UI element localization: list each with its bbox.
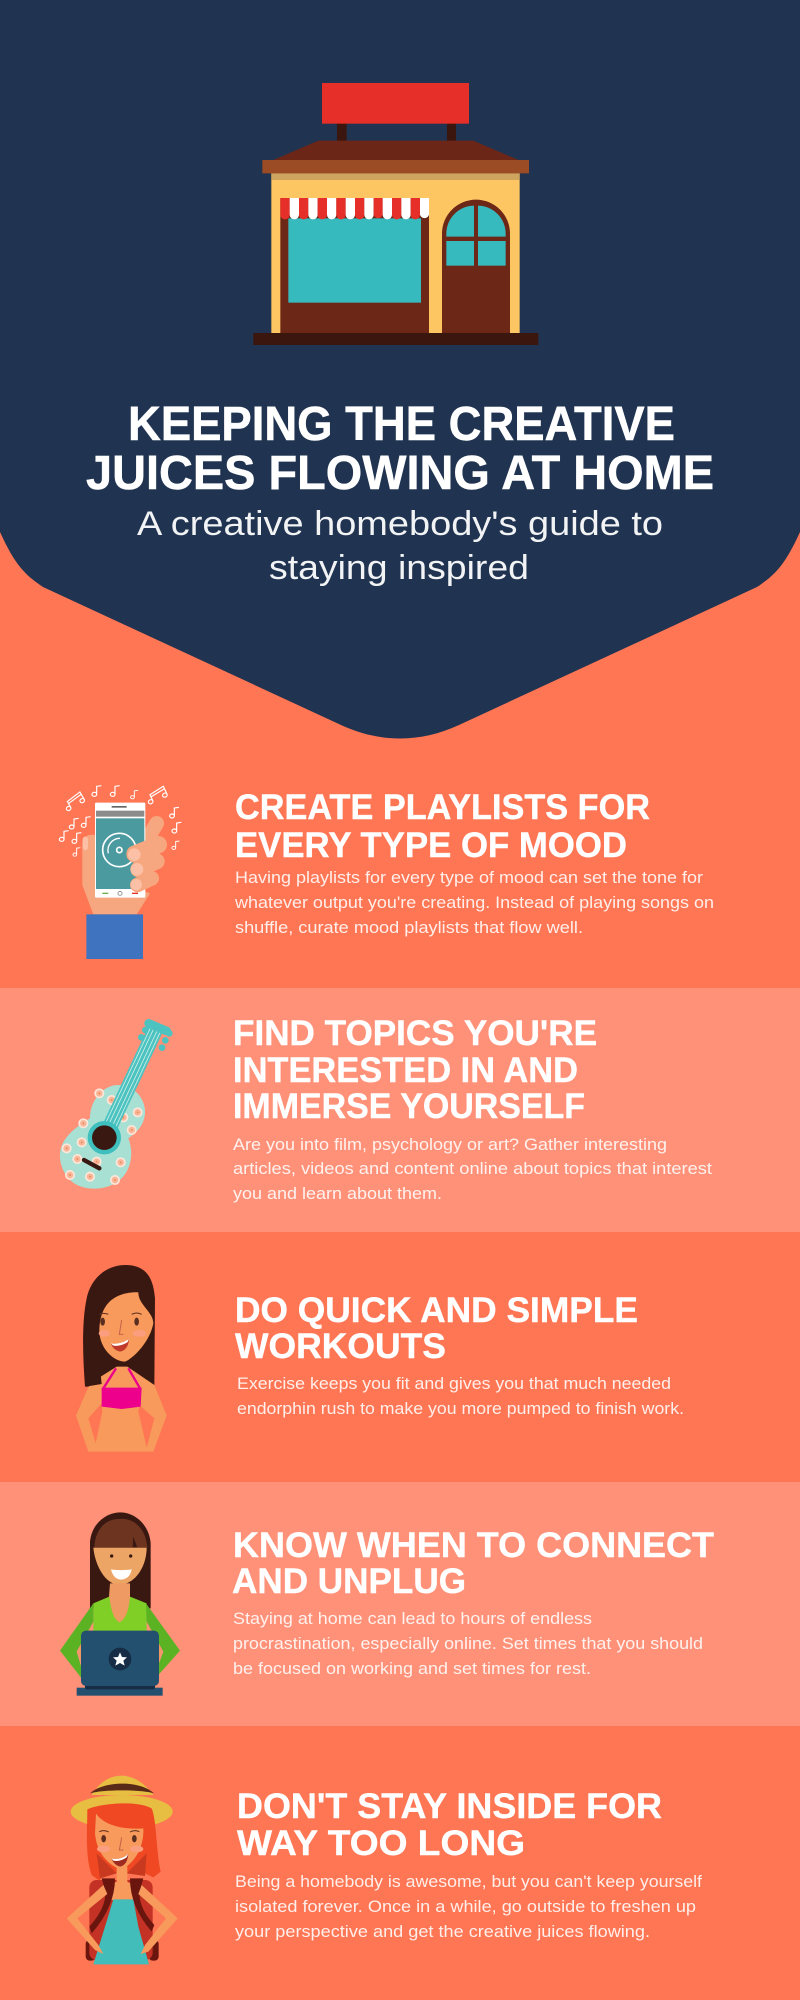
band: topic 2 — [0, 988, 800, 1232]
panel: connect and unplug — [60, 1512, 714, 1696]
heading: find topics: IMMERSE YOURSELF — [233, 1087, 585, 1126]
text: find topics: Are you into film, psychology or art? Gather interesting — [233, 1135, 667, 1154]
subtitle — [137, 505, 663, 587]
text: find topics — [233, 1135, 712, 1203]
heading: quick workouts: DO QUICK AND SIMPLE — [235, 1291, 638, 1330]
text: create playlists — [234, 868, 714, 937]
text: connect and unplug: Staying at home can lead to hours of endless — [233, 1609, 592, 1628]
text: quick workouts — [237, 1374, 684, 1418]
heading: connect and unplug — [232, 1526, 714, 1601]
icon: woman in pink top — [76, 1265, 167, 1452]
text: find topics: articles, videos and content online about topics that interest — [233, 1159, 712, 1178]
text: go outside — [235, 1872, 702, 1941]
heading: connect and unplug: AND UNPLUG — [232, 1562, 466, 1601]
icon: hand holding phone — [59, 786, 181, 959]
heading: find topics: FIND TOPICS YOU'RE — [233, 1014, 597, 1053]
heading: find topics: INTERESTED IN AND — [233, 1051, 578, 1090]
heading: create playlists: CREATE PLAYLISTS FOR — [235, 788, 650, 827]
text: connect and unplug: procrastination, especially online. Set times that you should — [233, 1634, 703, 1653]
heading: find topics — [233, 1014, 597, 1126]
icon: guitar — [60, 1023, 173, 1189]
header shape — [0, 0, 800, 738]
heading: go outside — [237, 1787, 662, 1863]
icon: shop house — [253, 83, 538, 345]
text: create playlists: Having playlists for every type of mood can set the tone for — [235, 868, 703, 887]
heading: connect and unplug: KNOW WHEN TO CONNECT — [233, 1526, 714, 1565]
title: KEEPING THE CREATIVE — [128, 398, 675, 451]
band: topic 4 — [0, 1482, 800, 1726]
text: go outside: isolated forever. Once in a while, go outside to freshen up — [235, 1897, 696, 1916]
heading: go outside: DON'T STAY INSIDE FOR — [237, 1787, 662, 1826]
panel: quick workouts — [76, 1265, 684, 1452]
text: quick workouts: endorphin rush to make you more pumped to finish work. — [237, 1399, 684, 1418]
subtitle: staying inspired — [269, 549, 529, 587]
text: create playlists: shuffle, curate mood playlists that flow well. — [235, 918, 583, 937]
text: create playlists: whatever output you're creating. Instead of playing songs on — [234, 893, 714, 912]
panel: create playlists — [59, 786, 714, 959]
title — [86, 398, 714, 500]
heading: create playlists — [235, 788, 650, 865]
panel: go outside — [67, 1776, 702, 1964]
text: connect and unplug — [233, 1609, 703, 1678]
title: JUICES FLOWING AT HOME — [86, 447, 714, 500]
icon: woman with laptop — [60, 1512, 180, 1696]
text: find topics: you and learn about them. — [233, 1184, 442, 1203]
text: go outside: Being a homebody is awesome, but you can't keep yourself — [235, 1872, 702, 1891]
heading: quick workouts: WORKOUTS — [235, 1327, 446, 1366]
text: go outside: your perspective and get the creative juices flowing. — [235, 1922, 650, 1941]
text: quick workouts: Exercise keeps you fit and gives you that much needed — [237, 1374, 671, 1393]
heading: go outside: WAY TOO LONG — [237, 1824, 525, 1863]
icon: woman with hat and backpack — [67, 1776, 178, 1964]
heading: create playlists: EVERY TYPE OF MOOD — [235, 826, 627, 865]
text: connect and unplug: be focused on working and set times for rest. — [233, 1659, 591, 1678]
panel: find topics — [60, 1014, 712, 1203]
heading: quick workouts — [235, 1291, 638, 1366]
subtitle: A creative homebody's guide to — [137, 505, 663, 543]
